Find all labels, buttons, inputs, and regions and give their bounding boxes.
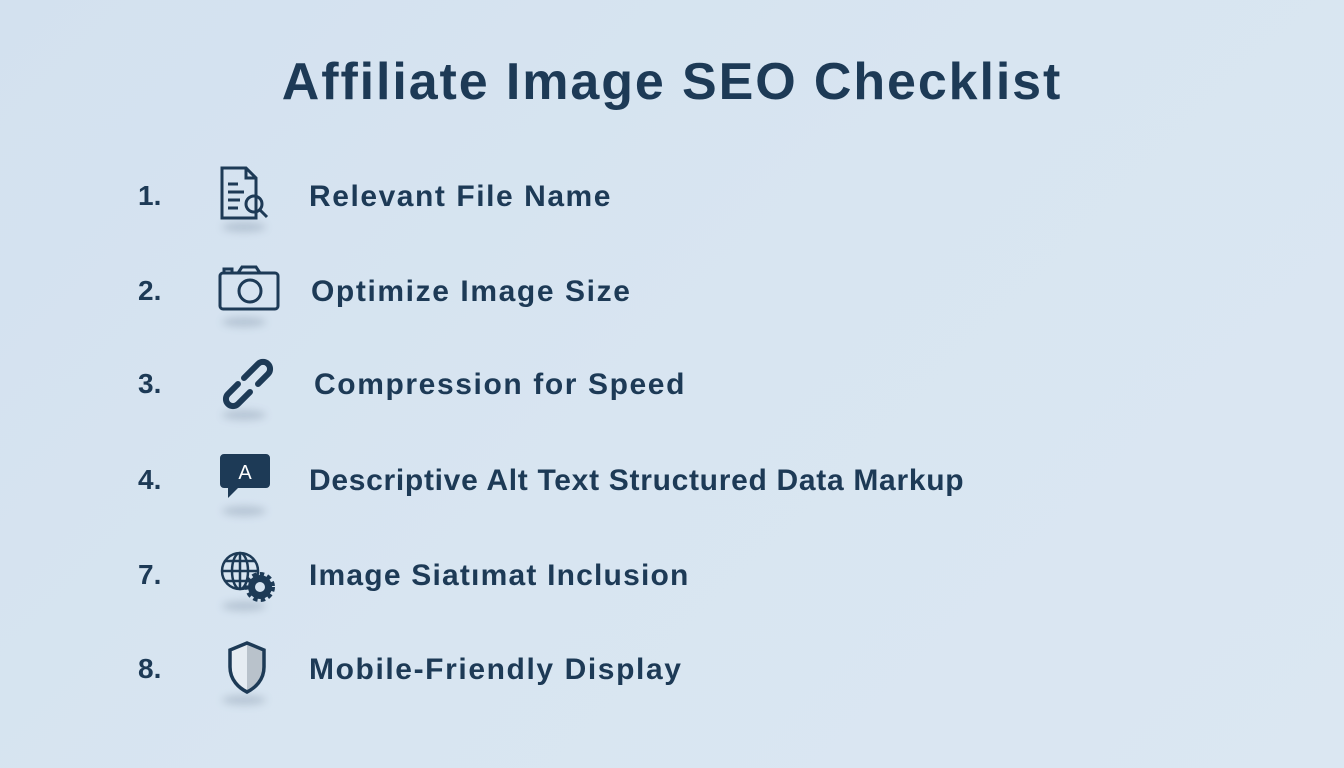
icon: alt text bubble	[220, 454, 270, 498]
item 8	[138, 641, 683, 708]
item 7: 7.	[138, 559, 161, 590]
item 8: 8.	[138, 653, 161, 684]
item 8: Mobile-Friendly Display	[309, 653, 683, 686]
item 4: Descriptive Alt Text Structured Data Markup	[309, 464, 964, 497]
item 7: Image Siatımat Inclusion	[309, 559, 690, 592]
item 2	[138, 266, 631, 330]
icon: camera	[218, 266, 280, 310]
item 1: 1.	[138, 180, 161, 211]
icon: alt text bubble: A	[238, 462, 252, 484]
item 3	[138, 358, 686, 422]
item 1: Relevant File Name	[309, 180, 612, 213]
icon: link	[222, 358, 274, 410]
item 4: 4.	[138, 464, 161, 495]
icon: document search	[220, 166, 268, 220]
item 1	[138, 166, 612, 234]
item 3: 3.	[138, 368, 161, 399]
title: Affiliate Image SEO Checklist	[282, 53, 1062, 111]
item 2: Optimize Image Size	[311, 275, 631, 308]
icon: shield	[228, 641, 266, 694]
item 3: Compression for Speed	[314, 368, 686, 401]
item 4	[138, 454, 964, 518]
item 2: 2.	[138, 275, 161, 306]
icon: globe gear	[220, 552, 275, 602]
item 7	[138, 552, 690, 614]
